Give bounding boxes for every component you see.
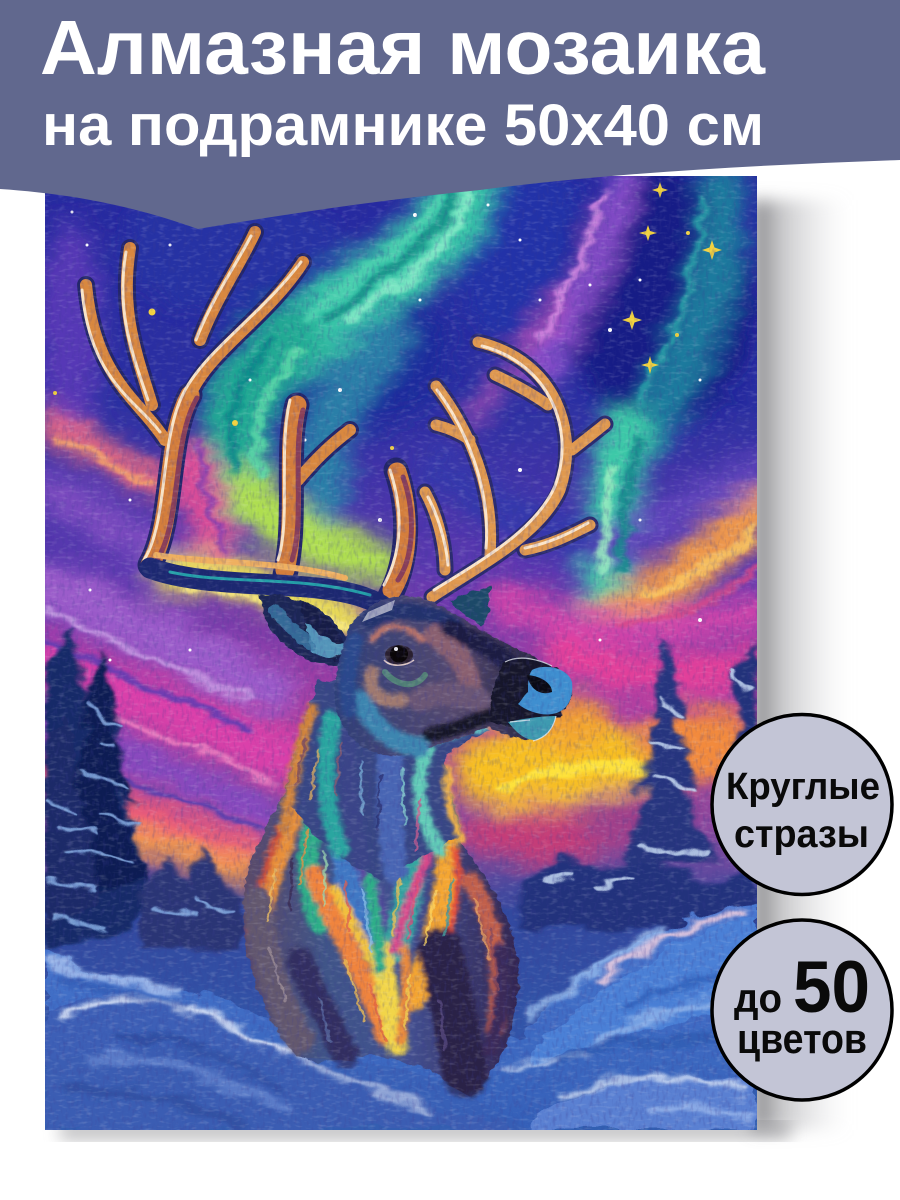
antlers	[82, 232, 605, 608]
neck	[285, 680, 490, 880]
right antler	[425, 342, 605, 597]
badge: up to 50 colours: цветов	[737, 1015, 867, 1062]
trees: left forest	[45, 625, 245, 950]
sky colour masses	[38, 170, 760, 870]
left antler	[82, 232, 411, 608]
reindeer body	[242, 792, 520, 1082]
left ear	[260, 596, 352, 665]
muzzle	[490, 657, 562, 730]
body colour strokes	[250, 770, 502, 1075]
neck colour strokes	[285, 710, 485, 870]
sky and landscape	[45, 176, 757, 1130]
badge: up to 50 colours	[712, 920, 892, 1100]
badge: round rhinestones: стразы	[734, 813, 869, 856]
sky background	[45, 176, 757, 1130]
badge: round rhinestones	[712, 714, 892, 894]
painting: reindeer under the aurora	[45, 176, 757, 1130]
lower lip	[508, 716, 556, 740]
antler base	[362, 600, 395, 622]
thin fur strokes	[268, 740, 498, 1050]
foreground snow	[86, 1051, 472, 1118]
badge: up to 50 colours: 50	[793, 947, 870, 1028]
aurora brush strokes	[45, 190, 757, 830]
subtitle: на подрамнике 50х40 см	[42, 93, 764, 158]
header banner	[0, 0, 900, 229]
nose	[518, 667, 572, 715]
right ear	[450, 586, 490, 628]
stars	[53, 182, 722, 450]
badge: up to 50 colours: до	[734, 975, 782, 1021]
brush texture: dark	[45, 176, 757, 1130]
brush texture: light	[45, 176, 757, 1130]
snow drifts	[45, 900, 757, 1130]
badge: round rhinestones: Круглые	[726, 766, 880, 808]
reindeer fur	[244, 586, 519, 1086]
eye patch	[385, 672, 425, 684]
muzzle highlight	[505, 658, 556, 741]
head colour strokes	[348, 611, 510, 747]
head	[335, 596, 571, 756]
canvas shadow	[60, 200, 847, 1140]
trees: right forest	[520, 630, 757, 930]
eye	[384, 645, 414, 665]
reindeer	[244, 586, 572, 1086]
title: Алмазная мозаика	[40, 5, 766, 91]
